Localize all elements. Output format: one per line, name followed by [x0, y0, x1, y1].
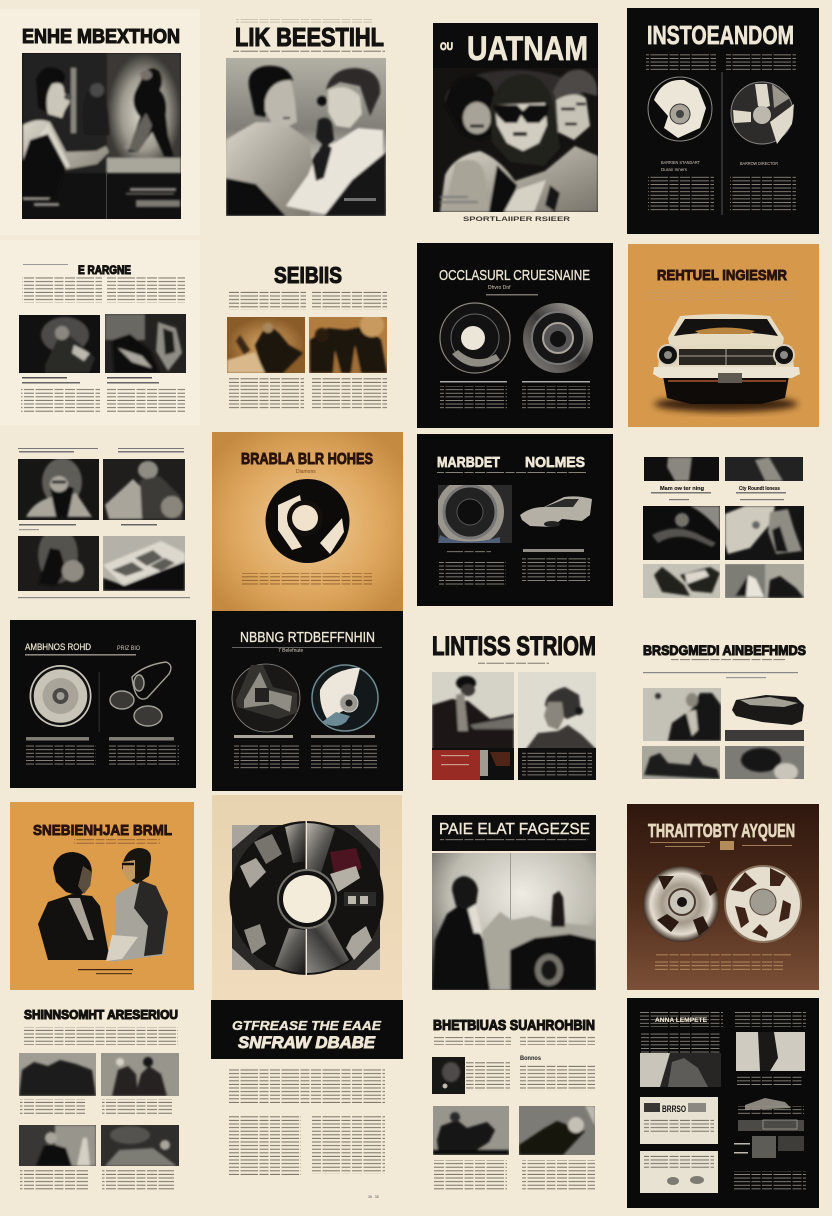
heading line 2: SNFRAW DBABE — [238, 1034, 376, 1052]
photo: man with glasses — [18, 459, 99, 520]
panel: orange — [10, 802, 194, 990]
icon: car side — [520, 496, 592, 527]
document 2 — [640, 1151, 718, 1193]
photo: sepia left — [227, 317, 305, 373]
subtitle — [643, 659, 798, 678]
poster 4: reels on black — [627, 8, 819, 234]
poster 24: black contact sheet — [627, 998, 819, 1208]
panel: poster 1 paper — [0, 9, 200, 235]
document 1: BRRSO — [662, 1104, 686, 1114]
photo: woman in profile with caption — [518, 672, 596, 780]
poster 12: six photo grid — [643, 457, 804, 598]
photo: lower left — [642, 746, 720, 779]
panel: black — [417, 434, 613, 606]
heading: LINTISS STRIOM — [432, 631, 596, 661]
heading: BRABLA BLR HOHES — [241, 451, 373, 468]
panel: paper — [0, 240, 200, 425]
panel: tan — [212, 795, 402, 1001]
photo: lower right — [725, 746, 804, 779]
subtitle — [233, 50, 385, 53]
divider — [722, 72, 723, 215]
page number: 36 . 35 — [368, 1195, 379, 1199]
captions and body — [21, 377, 185, 413]
icon: vinyl disc — [440, 303, 510, 373]
poster 8: orange car — [628, 244, 819, 427]
poster 15: two portraits — [432, 631, 596, 780]
icon: device sketch — [110, 662, 171, 726]
photo: wheel — [438, 485, 512, 543]
poster 19: man and car photo — [432, 815, 596, 990]
photo: sepia right — [309, 317, 387, 373]
subtitle: Dhvro Dnf — [488, 285, 511, 291]
photo: crouched figure — [18, 536, 99, 591]
poster 16: five photo article — [642, 642, 806, 781]
poster 10: orange with disc — [212, 432, 403, 611]
photo: group at table — [101, 1125, 179, 1166]
text columns — [26, 737, 179, 766]
photo: man beside car — [432, 853, 596, 990]
intro text — [23, 1027, 178, 1045]
poster 18: large disc on tan — [212, 795, 402, 1001]
poster 9: four photo grid — [18, 448, 190, 598]
header left: ANNA LEMPETE — [655, 1018, 707, 1024]
heading: SHINNSOMHT ARESERIOU — [24, 1007, 178, 1022]
subtitle — [440, 838, 588, 841]
poster 14: two discs on black — [212, 611, 403, 791]
figure: left man — [38, 852, 110, 960]
tag and rule: PRIZ BIO — [117, 646, 140, 652]
photo strip — [725, 730, 804, 741]
photo: couple — [19, 1125, 96, 1166]
figure: right man — [106, 848, 168, 962]
subtitle — [478, 662, 549, 665]
icon: right reel — [731, 82, 794, 144]
text block with subhead: Bonnos — [520, 1056, 542, 1062]
photo: lower left — [643, 564, 720, 598]
photo: woman at wheel — [643, 506, 720, 560]
footer line — [18, 597, 190, 598]
photo: couple — [226, 58, 386, 216]
poster 22: text-heavy article — [211, 1000, 403, 1199]
intro text — [433, 1035, 595, 1045]
text columns — [234, 735, 377, 769]
heading: NBBNG RTDBEFFNHIN — [240, 630, 375, 646]
heading: SNEBIENHJAE BRML — [33, 822, 172, 839]
photo: three women — [438, 68, 598, 212]
icon: collage wheel — [230, 821, 384, 976]
body text — [228, 378, 387, 410]
intro text — [228, 290, 387, 310]
ornament rule — [650, 841, 792, 850]
tag and rule — [25, 646, 140, 656]
panel: black — [627, 998, 819, 1208]
subtitle top — [236, 19, 372, 22]
body text — [655, 953, 791, 971]
panel: brown gradient — [627, 804, 819, 990]
body text — [433, 1160, 595, 1190]
icon: black disc — [266, 479, 350, 563]
header lines — [18, 448, 184, 452]
captions: Mam ow ter ning — [660, 486, 704, 492]
heading: AMBHNOS ROHD — [25, 642, 91, 652]
photo: woman and dancer — [22, 53, 181, 219]
heading: REHTUEL INGIESMR — [657, 267, 787, 284]
text beside thumbnail — [466, 1061, 510, 1091]
icon: speaker disc — [30, 665, 92, 727]
heading: SEIBIIS — [274, 262, 342, 288]
captions and text: BARROW DIRECTOR — [740, 161, 779, 166]
poster 17: two men on orange — [10, 802, 194, 990]
photo right — [105, 314, 186, 373]
text columns — [440, 381, 590, 410]
poster 13: disc and device on black — [10, 620, 196, 788]
heading: E RARGNE — [78, 263, 131, 277]
subtitle — [74, 839, 160, 846]
photo: hands and glass — [103, 459, 185, 520]
heading right: NOLMES — [525, 454, 585, 471]
subtitle — [646, 289, 796, 300]
captions and text: BARRIEN STANDART — [661, 160, 700, 165]
photo: two people — [101, 1053, 179, 1096]
panel: black cover — [433, 23, 598, 212]
photo left — [19, 315, 100, 373]
icon: left wheel — [643, 866, 719, 942]
panel: black — [417, 243, 613, 428]
header band — [432, 815, 596, 851]
photo: reclining figure — [433, 1106, 509, 1155]
heading: OCCLASURL CRUESNAINE — [439, 267, 590, 284]
heading: UATNAM — [467, 30, 588, 68]
icon: car — [732, 695, 804, 725]
icon: speaker disc — [523, 303, 593, 373]
photo: top left — [644, 457, 719, 481]
heading: BHETBIUAS SUAHROHBIN — [433, 1018, 595, 1034]
caption row — [19, 524, 157, 530]
heading line 1: GTFREASE THE EAAE — [232, 1019, 382, 1033]
right column details — [734, 1098, 806, 1190]
intro text — [229, 1069, 385, 1105]
document 1 — [640, 1097, 718, 1144]
icon: right wheel — [725, 866, 801, 942]
captions — [651, 486, 786, 500]
poster 3: three women cover — [433, 23, 598, 223]
icon: left disc — [232, 664, 300, 732]
photo: crowd — [19, 1053, 96, 1096]
intro text — [22, 264, 185, 303]
poster 6: sepia article — [227, 262, 387, 410]
poster 20: chrome wheels on brown — [627, 804, 819, 990]
heading: PAIE ELAT FAGEZSE — [439, 821, 590, 838]
poster 23: article with photos — [432, 1018, 595, 1190]
captions and text: Duran Inners — [661, 167, 688, 172]
column right — [312, 1114, 385, 1174]
captions — [20, 1099, 172, 1116]
subtitle — [486, 285, 538, 296]
heading: LIK BEESTIHL — [235, 22, 384, 52]
poster 21: four photo article — [19, 1007, 179, 1190]
photo: car interior — [519, 1106, 595, 1155]
text block with subhead — [520, 1056, 595, 1091]
photo: woman at car with red panel — [432, 672, 514, 780]
thumbnail photo — [432, 1057, 465, 1094]
icon: left reel — [648, 77, 712, 141]
photo: bright figure — [725, 506, 804, 560]
body text — [20, 1170, 174, 1190]
text columns — [439, 549, 590, 587]
captions and text — [648, 160, 796, 211]
heading: BRSDGMEDI AINBEFHMDS — [643, 642, 806, 658]
panel: black — [10, 620, 196, 788]
small masthead: OU — [440, 41, 453, 53]
photo: lower right — [725, 564, 804, 598]
poster 5: article with two photos — [0, 240, 200, 425]
caption: SPORTLAIIPER RSIEER — [463, 216, 570, 223]
panel: black background — [627, 8, 819, 234]
header right — [735, 1011, 806, 1027]
captions: Cty Roundt Ioness — [739, 486, 780, 492]
photo: figure in coat — [643, 688, 721, 741]
image: left dark block — [640, 1033, 721, 1087]
poster 11: wheel and car on black — [417, 434, 613, 606]
heading: ENHE MBEXTHON — [22, 26, 180, 48]
photo: top right — [725, 457, 803, 481]
column left — [229, 1114, 301, 1176]
divider — [98, 672, 100, 732]
header left — [640, 1011, 723, 1027]
photo: abstract plates — [103, 536, 185, 591]
text columns — [646, 52, 796, 70]
subtitle — [437, 472, 587, 475]
subtitle: 7 Belefnute — [278, 648, 304, 654]
image: right light block — [736, 1032, 805, 1085]
panel: orange — [628, 244, 819, 427]
poster 2: couple photo — [226, 19, 386, 216]
icon: right disc — [312, 665, 378, 731]
header band — [211, 1000, 403, 1059]
car illustration — [653, 314, 800, 412]
panel: orange gradient — [212, 432, 403, 611]
poster 7: two discs on black — [417, 243, 613, 428]
panel: black — [212, 611, 403, 791]
poster 1: portrait with title — [0, 9, 200, 235]
heading left: MARBDET — [437, 454, 500, 471]
subtitle: Diamons — [296, 469, 316, 475]
body text — [242, 573, 372, 586]
footer text — [78, 969, 133, 974]
